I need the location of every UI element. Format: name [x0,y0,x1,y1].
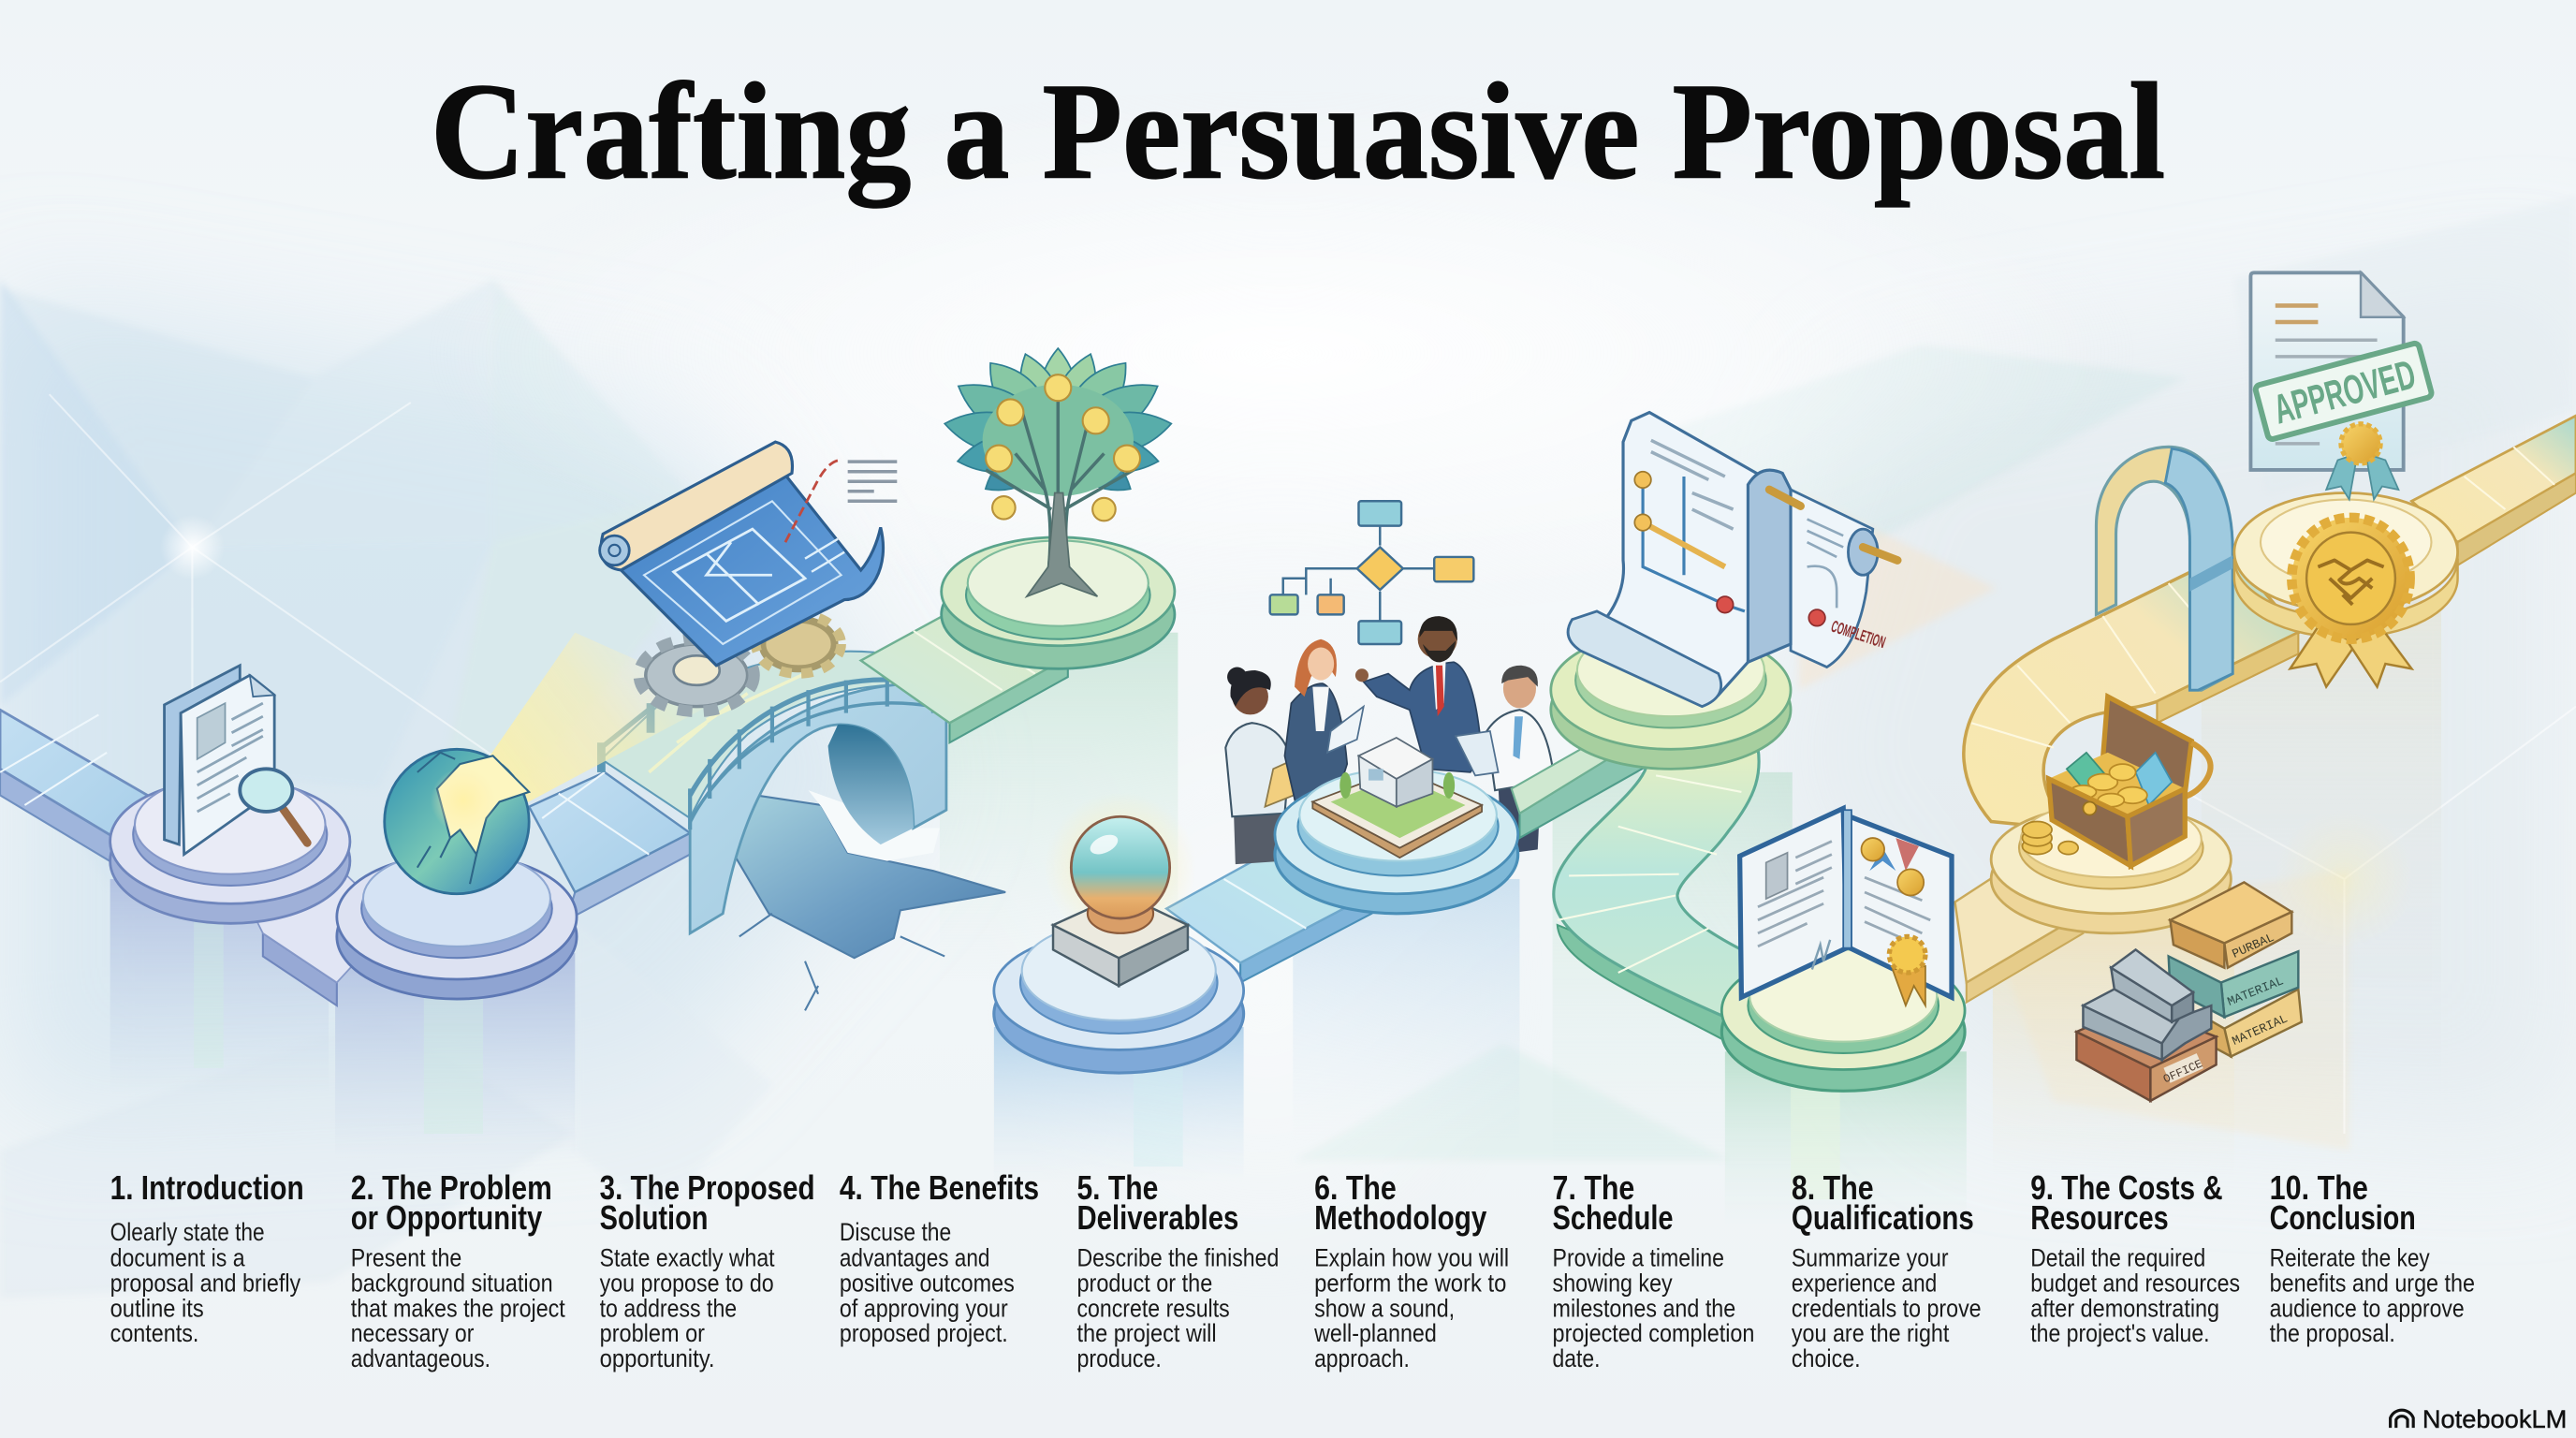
step 10 text: 10. The [2270,1168,2368,1207]
icon: schedule scroll: COMPLETION [1829,617,1888,652]
stamp: approved: APPROVED [2269,351,2421,433]
stamp: approved [2255,343,2433,440]
step 6 text: 6. The [1314,1168,1397,1207]
chasm under the bridge [726,790,1005,1010]
step 7 text: date. [1553,1343,1600,1372]
step 9 text: budget and resources [2030,1268,2240,1297]
icon: blueprint [600,442,897,666]
left stack: OFFICE [2161,1057,2204,1086]
step 9 text: Detail the required [2030,1242,2205,1271]
icon: credentials binder [1740,808,1952,1005]
step 2 text: or Opportunity [351,1198,542,1237]
step 5 text: the project will [1076,1318,1217,1347]
step 3 text: opportunity. [600,1343,714,1372]
platform 1 [110,775,394,1005]
step 9 text: the project's value. [2030,1318,2210,1347]
right stack: MATERIAL [2230,1011,2290,1049]
step 9 text [2030,1168,2240,1347]
right stack [2169,882,2302,1056]
step 2 text: background situation [351,1268,553,1297]
step 9 text: Resources [2030,1198,2169,1237]
step labels [110,1168,2475,1372]
step 5 text: 5. The [1076,1168,1158,1207]
step 6 text: Explain how you will [1314,1242,1509,1271]
NotebookLM logo: NotebookLM [2422,1404,2567,1433]
step 1 text: contents. [110,1318,198,1347]
step 2 text: that makes the project [351,1293,565,1322]
icon: schedule scroll [1568,413,1897,707]
platform 10 [2234,493,2458,638]
step 6 text: perform the work to [1314,1268,1506,1297]
step 3 text [600,1168,815,1372]
step 3 text: to address the [600,1293,737,1322]
step 7 text: projected completion [1553,1318,1754,1347]
path: right exit road [2411,416,2576,565]
path: road to tree [861,600,1068,742]
step 9 text: after demonstrating [2030,1293,2219,1322]
step 5 text: Describe the finished [1076,1242,1279,1271]
step 8 text: choice. [1792,1343,1861,1372]
step 7 text: showing key [1553,1268,1673,1297]
step 4 text: Discuse the [840,1217,951,1246]
icon: approved certificate [2250,272,2433,500]
icon: building model [1312,738,1482,858]
step 8 text: Summarize your [1792,1242,1949,1271]
right stack: PURBAL [2230,931,2276,961]
step 5 text: produce. [1076,1343,1162,1372]
step 2 text [351,1168,565,1372]
step 1 text: Olearly state the [110,1217,265,1246]
person: woman with folder [1225,668,1310,864]
icon: gold seal with handshake [2291,518,2411,687]
step 10 text: benefits and urge the [2270,1268,2475,1297]
step 2 text: necessary or [351,1318,474,1347]
step 5 text: product or the [1076,1268,1212,1297]
step 7 text: 7. The [1553,1168,1634,1207]
step 1 text: outline its [110,1293,204,1322]
step 2 text: Present the [351,1242,461,1271]
step 5 text: concrete results [1076,1293,1230,1322]
path: gold road to the conclusion [1955,552,2298,1003]
icon: treasure chest [2022,697,2211,866]
step 6 text: well-planned [1313,1318,1437,1347]
path: road crystal to methodology [1166,844,1372,983]
step 1 text: 1. Introduction [110,1168,304,1207]
icon: flowchart [1270,501,1473,644]
step 8 text: experience and [1792,1268,1937,1297]
platform 4 [942,537,1175,668]
person: presenting man with beard [1355,616,1482,772]
platform 5 [994,922,1244,1073]
platform 6 [1275,769,1518,914]
step 6 text: Methodology [1314,1198,1486,1237]
platform 7 [1551,624,1791,769]
path: connector methodology to schedule [1512,727,1647,838]
step 4 text: 4. The Benefits [840,1168,1039,1207]
icon: document with magnifier [165,666,307,855]
step 10 text: Reiterate the key [2270,1242,2430,1271]
step 3 text: 3. The Proposed [600,1168,815,1207]
step 8 text: credentials to prove [1792,1293,1982,1322]
title: Crafting a Persuasive Proposal [431,55,2165,209]
path: winding green road [1554,733,1808,1051]
icon: stacked material crates [2076,882,2302,1101]
bridge [601,652,946,933]
step 7 text: milestones and the [1553,1293,1735,1322]
step 2 text: 2. The Problem [351,1168,552,1207]
step 1 text [110,1168,304,1347]
step 3 text: Solution [600,1198,708,1237]
step 7 text [1553,1168,1754,1372]
platform 2 [337,851,577,999]
team of four people [1225,616,1554,864]
step 9 text: 9. The Costs & [2030,1168,2223,1207]
step 6 text [1313,1168,1509,1372]
step 1 text: document is a [110,1242,245,1271]
step 7 text: Provide a timeline [1553,1242,1724,1271]
icon: stone arch [2096,447,2232,690]
person: man with tablet [1456,666,1554,855]
right stack: MATERIAL [2226,974,2286,1009]
step 10 text: Conclusion [2270,1198,2416,1237]
step 7 text: Schedule [1553,1198,1674,1237]
left stack [2076,949,2217,1101]
path: connector to bridge [529,772,690,920]
icon: crystal ball [1045,792,1196,986]
step 5 text: Deliverables [1076,1198,1238,1237]
icon: cracked globe [385,749,529,894]
step 3 text: you propose to do [600,1268,774,1297]
step 4 text: positive outcomes [840,1268,1015,1297]
step 4 text: proposed project. [840,1318,1008,1347]
step 4 text: advantages and [840,1242,989,1271]
icon: gears [639,614,842,712]
step 2 text: advantageous. [351,1343,490,1372]
step 8 text: Qualifications [1792,1198,1974,1237]
icon: tree with fruit [942,348,1175,596]
path: left entrance road [0,710,165,884]
pillars under the platforms [110,600,2441,1224]
step 8 text: you are the right [1792,1318,1950,1347]
step 4 text: of approving your [840,1293,1008,1322]
platform 8 [1721,949,1965,1091]
step 3 text: problem or [600,1318,705,1347]
step 8 text [1792,1168,1982,1372]
platform 9 [1991,801,2231,933]
step 10 text [2270,1168,2475,1347]
step 1 text: proposal and briefly [110,1268,301,1297]
step 10 text: the proposal. [2270,1318,2395,1347]
step 10 text: audience to approve [2270,1293,2465,1322]
beam of light [450,633,723,829]
step 3 text: State exactly what [600,1242,775,1271]
step 6 text: show a sound, [1314,1293,1455,1322]
step 5 text [1076,1168,1279,1372]
step 6 text: approach. [1314,1343,1410,1372]
person: woman in blazer [1284,639,1364,814]
step 4 text [840,1168,1039,1347]
step 8 text: 8. The [1792,1168,1874,1207]
